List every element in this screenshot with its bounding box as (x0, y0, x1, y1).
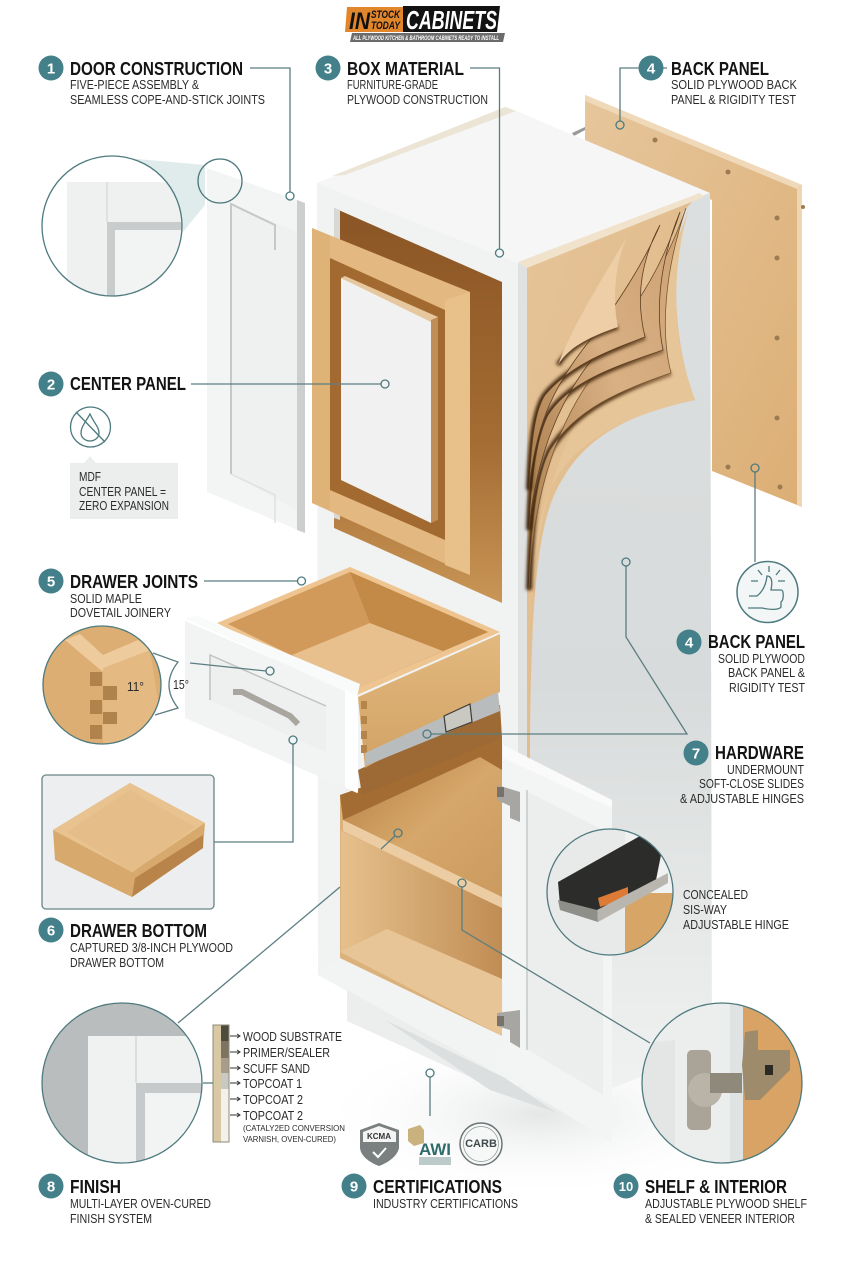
callout: dovetail joint: 15° (173, 677, 189, 692)
callout: drawer bottom card (42, 775, 214, 909)
callout: MDF note: ZERO EXPANSION (79, 498, 169, 513)
label 10: shelf and interior (614, 1174, 807, 1226)
callout: dovetail joint (43, 626, 189, 744)
label 8: finish: 8 (47, 1178, 55, 1196)
logo: STOCK (371, 9, 401, 21)
hinge upper (497, 785, 520, 822)
label 5: drawer joints: DRAWER JOINTS (70, 572, 198, 592)
label 10: shelf and interior: ADJUSTABLE PLYWOOD SHELF (645, 1196, 807, 1211)
label 7: hardware: & ADJUSTABLE HINGES (680, 791, 804, 806)
callout: MDF note: MDF (79, 469, 101, 484)
callout: door corner detail (42, 156, 242, 302)
logo: ALL PLYWOOD KITCHEN & BATHROOM CABINETS READY TO INSTALL (352, 36, 499, 42)
label 8: finish: FINISH (70, 1177, 121, 1197)
label 9: certifications: INDUSTRY CERTIFICATIONS (373, 1196, 518, 1211)
logo: IN (349, 8, 371, 35)
hinge note: CONCEALED (683, 887, 748, 902)
separate door (207, 168, 305, 533)
badge: AWI (408, 1125, 451, 1165)
lower cabinet interior (318, 738, 557, 1113)
veneer peel layers (518, 193, 704, 770)
label 1: door construction: SEAMLESS COPE-AND-STICK JOINTS (70, 92, 265, 107)
label 2: center panel: CENTER PANEL (70, 374, 186, 394)
label 2: center panel (38, 372, 186, 396)
label 4: back panel right (676, 630, 805, 695)
hinge note (683, 887, 789, 932)
label 10: shelf and interior: & SEALED VENEER INTERIOR (645, 1211, 795, 1226)
label 5: drawer joints: 5 (47, 574, 55, 590)
label 4: back panel right: BACK PANEL & (728, 665, 805, 680)
shelf (343, 757, 502, 897)
label 4: back panel top: PANEL & RIGIDITY TEST (671, 92, 796, 107)
label 3: box material (316, 56, 488, 107)
finish layer strip: (CATALY2ED CONVERSION (243, 1123, 345, 1133)
label 6: drawer bottom (38, 918, 233, 970)
certifications badges (360, 1123, 502, 1166)
open lower door (497, 745, 612, 1143)
label 6: drawer bottom: DRAWER BOTTOM (70, 921, 207, 941)
callout: hinge (642, 1003, 803, 1165)
label 3: box material: 3 (324, 60, 332, 78)
drawer side (358, 634, 500, 768)
label 5: drawer joints: SOLID MAPLE (70, 591, 142, 606)
label 7: hardware (680, 740, 804, 806)
logo (345, 5, 505, 42)
label 4: back panel right: BACK PANEL (708, 632, 805, 652)
label 6: drawer bottom: 6 (47, 922, 55, 940)
upper opening interior (334, 208, 502, 603)
back panel exploded (572, 95, 805, 507)
cabinet face frame (317, 183, 527, 1085)
hinge note: ADJUSTABLE HINGE (683, 917, 789, 932)
callout: dovetail joint: 11° (127, 679, 144, 694)
badge: CARB: CARB (465, 1138, 497, 1150)
label 4: back panel top (638, 56, 797, 107)
finish layer strip: WOOD SUBSTRATE (243, 1029, 342, 1044)
label 4: back panel right: 4 (685, 634, 694, 652)
icon: no water (70, 407, 110, 447)
label 7: hardware: 7 (692, 746, 700, 762)
drawer front (185, 621, 357, 793)
label 7: hardware: HARDWARE (715, 743, 804, 763)
cabinet floor (340, 929, 502, 1036)
icon: thumbs up rigidity (737, 562, 798, 622)
finish layer strip: TOPCOAT 1 (243, 1076, 302, 1091)
label 1: door construction (38, 56, 265, 107)
hinge lower (497, 1010, 520, 1048)
toe kick (347, 990, 557, 1113)
logo: TODAY (371, 20, 401, 32)
drawer interior (217, 567, 500, 695)
upper door frame (312, 228, 470, 575)
label 8: finish: FINISH SYSTEM (70, 1211, 152, 1226)
callout: slide mechanism (547, 829, 673, 955)
callout: MDF note (70, 456, 178, 519)
label 3: box material: BOX MATERIAL (347, 59, 464, 79)
label 8: finish (38, 1174, 211, 1226)
label 4: back panel right: SOLID PLYWOOD (718, 651, 805, 666)
label 5: drawer joints: DOVETAIL JOINERY (70, 605, 171, 620)
label 4: back panel top: BACK PANEL (671, 59, 769, 79)
label 9: certifications: CERTIFICATIONS (373, 1177, 502, 1197)
badge: KCMA (360, 1123, 399, 1166)
drawer pull (233, 692, 298, 724)
label 6: drawer bottom: DRAWER BOTTOM (70, 955, 164, 970)
label 4: back panel right: RIGIDITY TEST (729, 680, 805, 695)
leader lines (178, 68, 759, 1116)
label 4: back panel top: 4 (647, 60, 656, 78)
logo: CABINETS (406, 5, 497, 35)
label 9: certifications (342, 1174, 518, 1211)
label 1: door construction: 1 (47, 60, 55, 78)
callout: finish detail (42, 1003, 208, 1166)
label 10: shelf and interior: SHELF & INTERIOR (645, 1177, 787, 1197)
label 6: drawer bottom: CAPTURED 3/8-INCH PLYWOOD (70, 940, 233, 955)
label 8: finish: MULTI-LAYER OVEN-CURED (70, 1196, 211, 1211)
finish layer strip: TOPCOAT 2 (243, 1108, 303, 1123)
finish layer strip: TOPCOAT 2 (243, 1092, 303, 1107)
label 3: box material: PLYWOOD CONSTRUCTION (347, 92, 488, 107)
cabinet side panel (518, 193, 712, 1088)
pulled-out drawer (185, 567, 502, 795)
callout: MDF note: CENTER PANEL = (79, 484, 166, 499)
label 4: back panel top: SOLID PLYWOOD BACK (671, 77, 797, 92)
center panel (341, 278, 431, 523)
drawer slide (365, 692, 500, 766)
cabinet top (317, 107, 710, 263)
badge: KCMA: KCMA (367, 1132, 391, 1141)
label 3: box material: FURNITURE-GRADE (347, 77, 438, 92)
finish layer strip: PRIMER/SEALER (243, 1045, 330, 1060)
finish layer strip (203, 1025, 345, 1144)
label 2: center panel: 2 (47, 376, 55, 394)
finish layer strip: SCUFF SAND (243, 1061, 310, 1076)
hinge note: SIS-WAY (683, 902, 727, 917)
badge: AWI: AWI (419, 1140, 451, 1159)
cabinet body (312, 107, 712, 1088)
label 10: shelf and interior: 10 (619, 1179, 633, 1194)
label 1: door construction: FIVE-PIECE ASSEMBLY & (70, 77, 199, 92)
label 9: certifications: 9 (350, 1178, 358, 1196)
finish layer strip: VARNISH, OVEN-CURED) (243, 1134, 336, 1144)
label 7: hardware: UNDERMOUNT (727, 762, 804, 777)
label 7: hardware: SOFT-CLOSE SLIDES (699, 776, 804, 791)
drawer underside (358, 705, 502, 795)
badge: CARB (460, 1123, 502, 1165)
label 1: door construction: DOOR CONSTRUCTION (70, 59, 243, 79)
label 5: drawer joints (38, 568, 198, 620)
